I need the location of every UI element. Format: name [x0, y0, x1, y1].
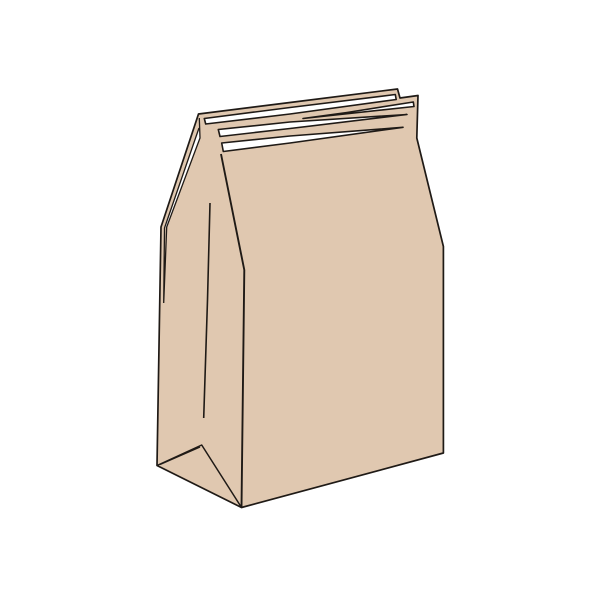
left gusset inner line: [164, 118, 200, 303]
strip: middle flap right: [303, 102, 414, 118]
side centre fold line: [204, 203, 210, 418]
bag body fill and outline: [157, 89, 443, 508]
top seal white strips: [204, 94, 414, 152]
strip: front flap: [222, 127, 403, 152]
front panel left edge: [221, 154, 244, 508]
strip: middle flap: [218, 114, 407, 136]
bottom gusset fold: [157, 445, 242, 508]
left gusset white sliver: [164, 129, 200, 228]
strip: back flap: [204, 94, 396, 124]
